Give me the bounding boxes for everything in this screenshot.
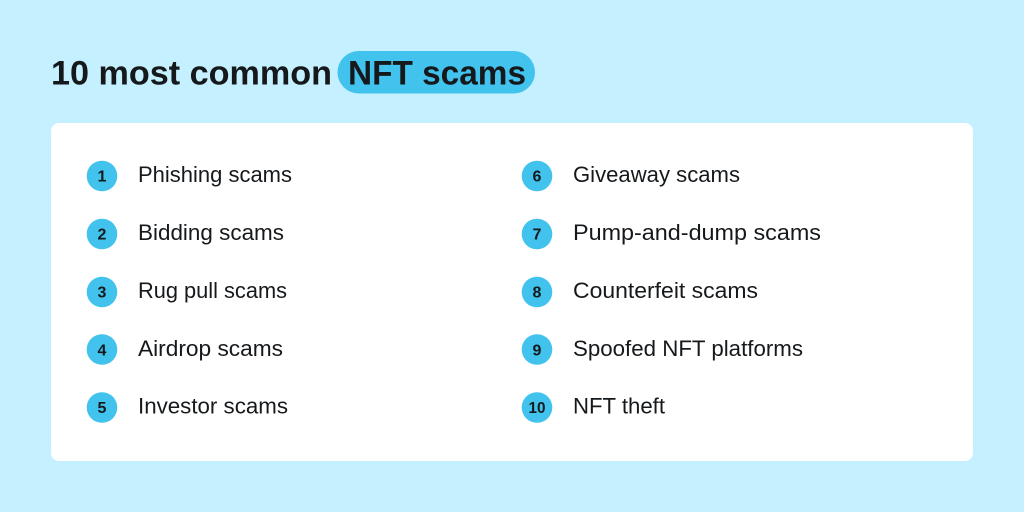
title highlight pill [338,51,535,94]
item 1: 1 [98,168,107,186]
item 4: Airdrop scams [138,336,283,361]
item 7: Pump-and-dump scams [573,220,821,245]
title [51,51,535,94]
item 9 [522,334,803,365]
item 2: 2 [98,226,107,244]
item 2 [87,219,284,249]
item 3 [87,277,287,307]
title text: highlighted: NFT scams [348,54,526,92]
item 8 [522,277,758,307]
panel background [51,123,973,461]
item 9: 9 [533,342,542,360]
item 10 [522,392,665,423]
item 8: Counterfeit scams [573,278,758,303]
item 5: 5 [98,400,107,417]
panel: scam list [51,123,973,461]
item 1: Phishing scams [138,162,292,187]
item 7 [522,219,821,249]
item 3: Rug pull scams [138,278,287,303]
item 7: 7 [533,226,542,244]
item 1 [87,161,292,191]
item 5 [87,392,288,423]
item 10: NFT theft [573,394,665,418]
item 2: Bidding scams [138,220,284,245]
title text: lead: 10 most common [51,54,332,92]
item 8: 8 [533,284,542,302]
item 4 [87,334,283,365]
item 5: Investor scams [138,394,288,418]
item 6: Giveaway scams [573,162,740,187]
item 4: 4 [98,342,107,360]
item 3: 3 [98,284,107,302]
item 9: Spoofed NFT platforms [573,336,803,361]
item 6: 6 [533,168,542,186]
item 6 [522,161,740,191]
item 10: 10 [528,400,546,417]
